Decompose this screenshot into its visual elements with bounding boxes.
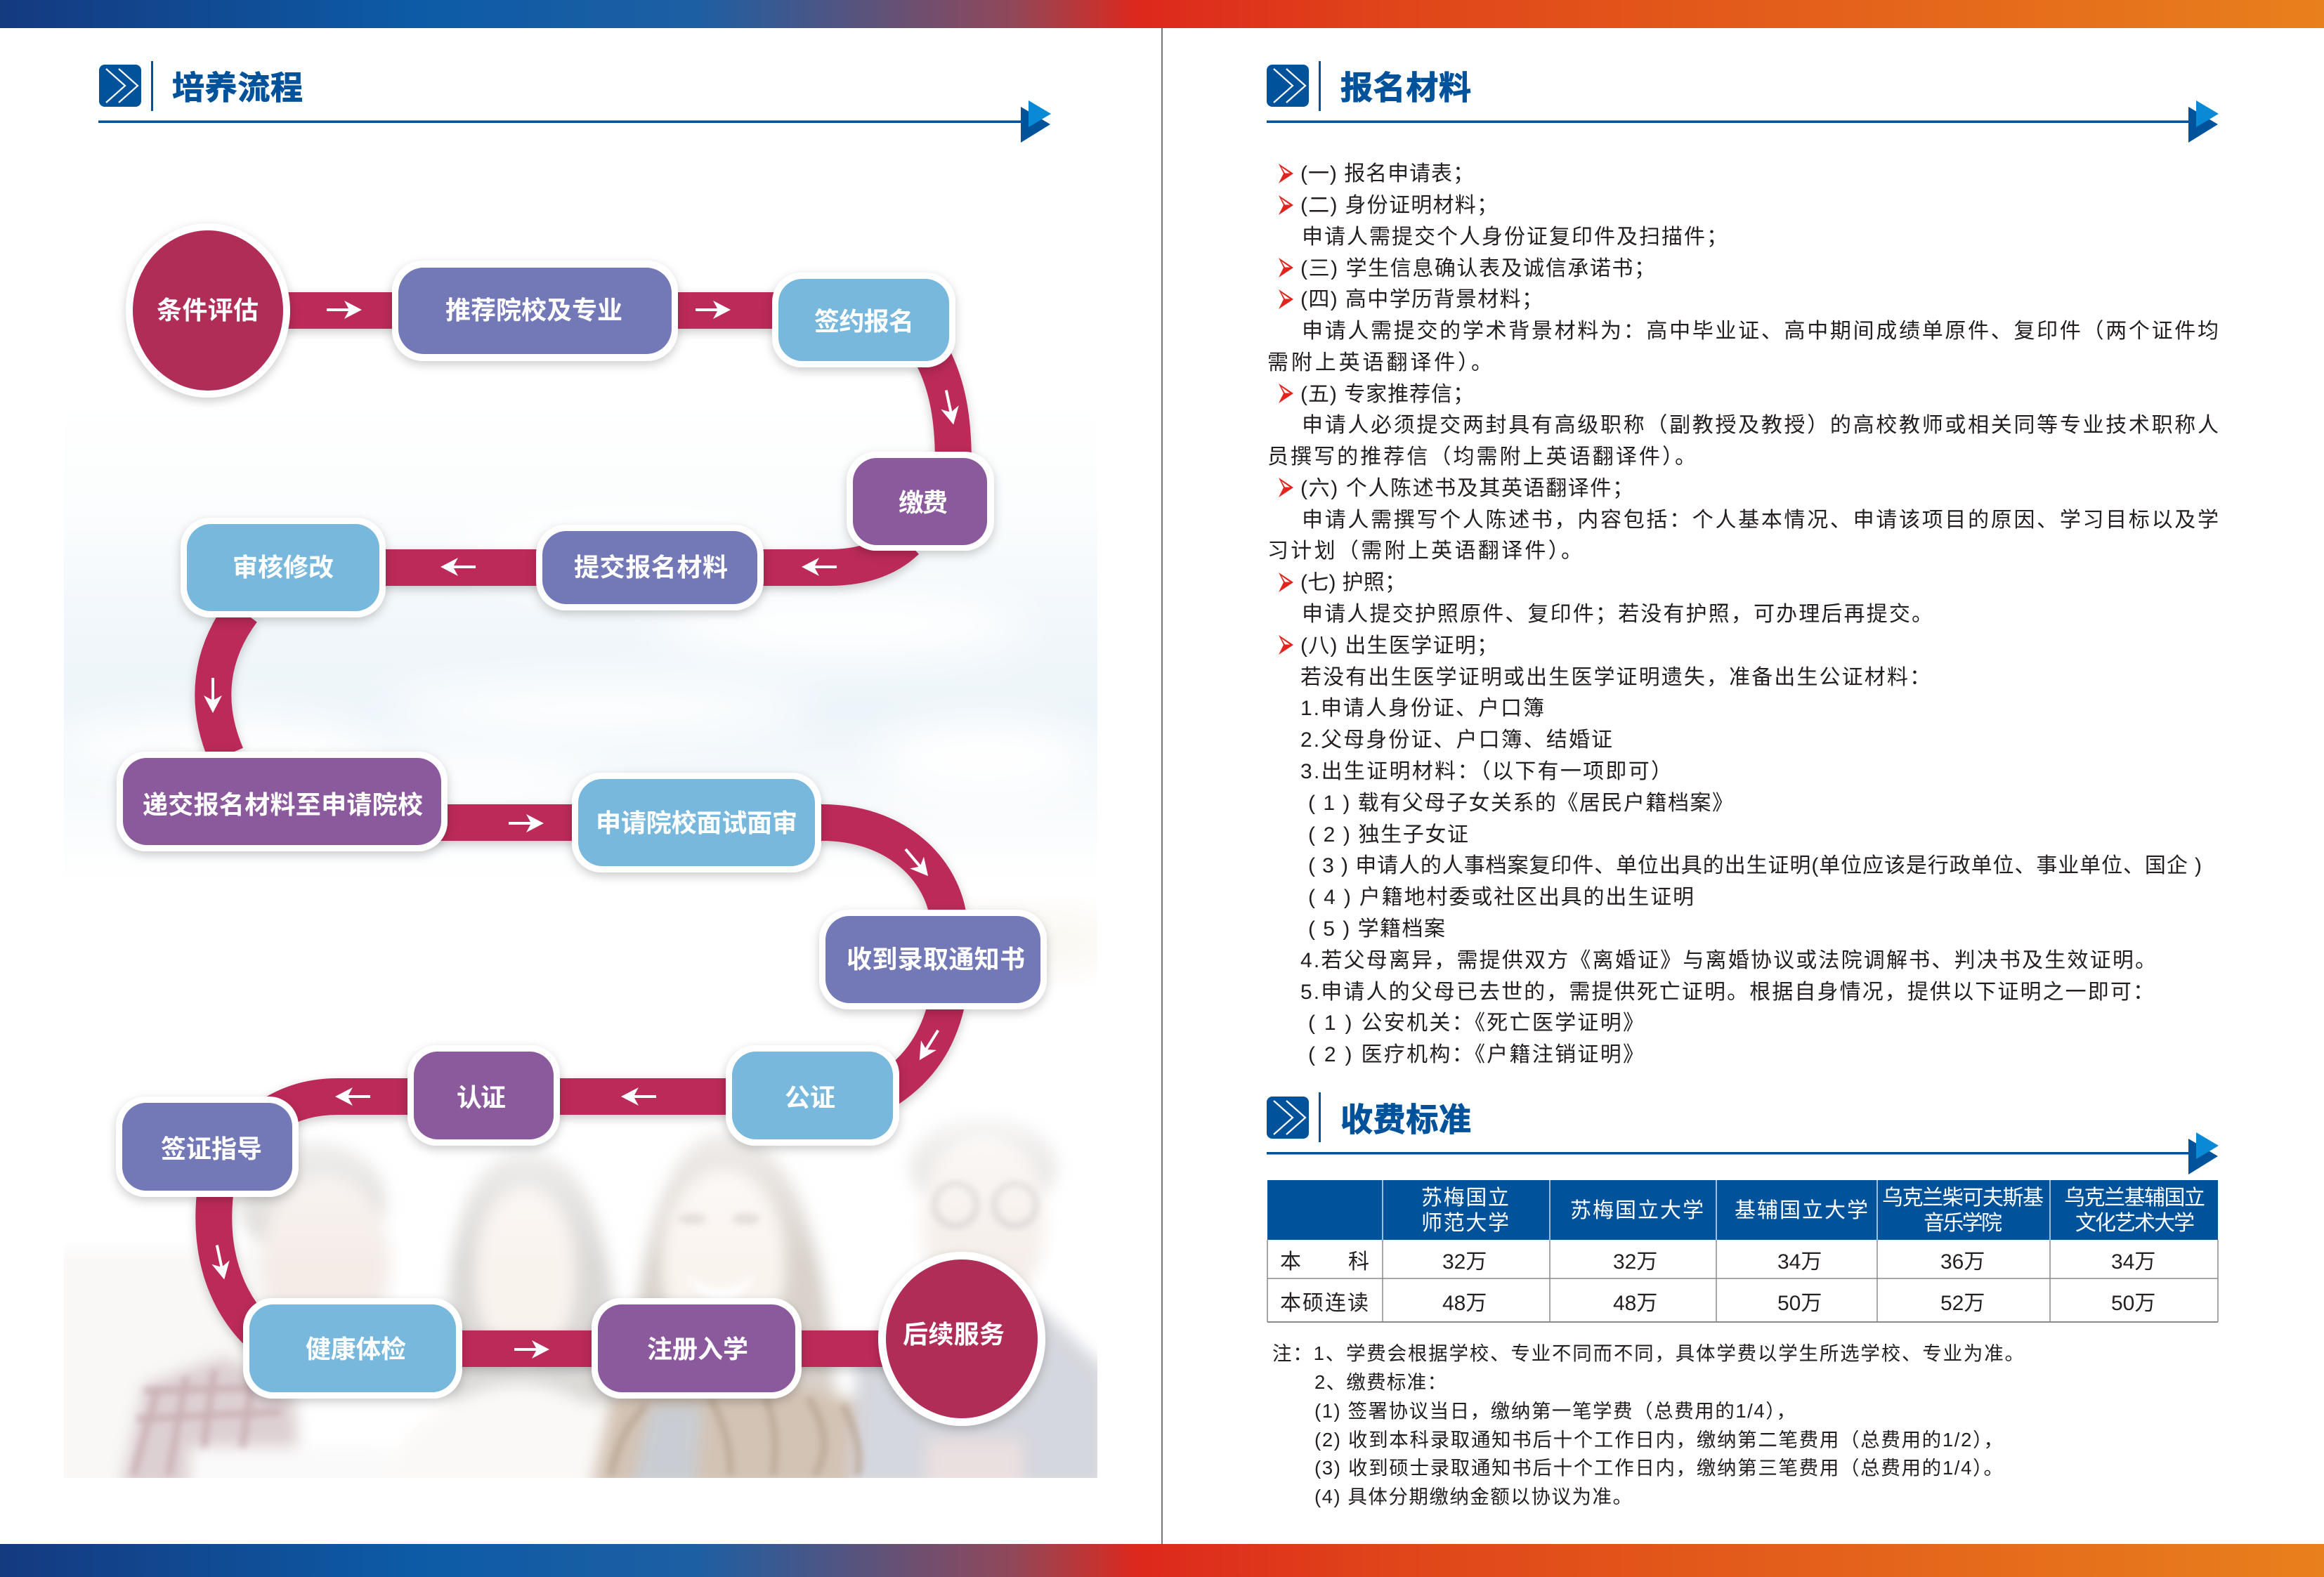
fee table: 乌克兰柴可夫斯基 [1882,1186,2044,1210]
fee table [1267,1180,2218,1322]
fee table: 本硕连读 [1280,1292,1369,1315]
step: 申请院校面试面审 [572,773,821,872]
step: 推荐院校及专业: 推荐院校及专业 [445,296,622,325]
text block: application materials list: (七) 护照； [1300,571,1406,594]
text block: application materials list: (八) 出生医学证明； [1300,634,1498,657]
text block: fee notes: (1) 签署协议当日，缴纳第一笔学费（总费用的1/4）， [1314,1400,1796,1422]
fee table: 基辅国立大学 [1735,1199,1868,1222]
text block: application materials list: 2.父母身份证、户口簿、结婚证 [1300,728,1612,752]
fee table: 50万 [2111,1292,2155,1315]
fee table: 苏梅国立 [1421,1186,1509,1210]
bottom gradient bar [0,1544,2324,1577]
step: 认证 [407,1045,560,1146]
panel: faded photo background of sky and students [42,400,1131,1489]
icon: line end arrow [1021,100,1051,143]
step: 审核修改 [181,518,386,617]
fee table: 50万 [1777,1292,1822,1315]
icon: double chevron [1267,1097,1309,1139]
flow chart: training process [116,223,1047,1426]
heading: 培养流程 [98,61,1051,143]
fee table: 本 [1280,1250,1301,1274]
step: 健康体检: 健康体检 [306,1335,406,1363]
text block: application materials list: 4.若父母离异，需提供双方《离婚证》与离婚协议或法院调解书、判决书及生效证明。 [1300,949,2156,972]
fee table: 34万 [1777,1250,1822,1274]
text block: application materials list: 员撰写的推荐信（均需附上英语翻译件）。 [1267,445,1696,469]
icon: double chevron [1267,65,1309,107]
text block: application materials list: 需附上英语翻译件）。 [1267,351,1492,374]
step: 审核修改: 审核修改 [233,553,334,582]
text block: fee notes [1272,1342,2024,1507]
text block: application materials list: (四) 高中学历背景材料； [1300,288,1543,311]
text block: application materials list: 1.申请人身份证、户口簿 [1300,697,1544,720]
fee table: 34万 [2111,1250,2155,1274]
text block: application materials list: (一) 报名申请表； [1300,162,1474,185]
text block: application materials list: ( 2 ) 医疗机构：《户籍注销证明》 [1308,1043,1644,1066]
fee table: 苏梅国立大学 [1570,1199,1704,1222]
fee table: 48万 [1613,1292,1657,1315]
text block: application materials list: ( 5 ) 学籍档案 [1308,917,1445,941]
text block: application materials list: 若没有出生医学证明或出生医学证明遗失，准备出生公证材料： [1300,666,1931,689]
top gradient bar [0,0,2324,28]
step: 健康体检 [243,1298,462,1399]
text block: application materials list: ( 4 ) 户籍地村委或社区出具的出生证明 [1308,886,1694,909]
fee table: 52万 [1940,1292,1985,1315]
text block: application materials list: 习计划（需附上英语翻译件）。 [1267,539,1582,563]
text block: fee notes: (4) 具体分期缴纳金额以协议为准。 [1314,1486,1632,1507]
heading text: 培养流程 [172,70,303,106]
step: 注册入学 [592,1298,802,1399]
step: 缴费: 缴费 [899,488,948,517]
text block: application materials list: ( 1 ) 载有父母子女关系的《居民户籍档案》 [1308,792,1733,815]
text block: application materials list: ( 3 ) 申请人的人事档案复印件、单位出具的出生证明(单位应该是行政单位、事业单位、国企 ) [1308,854,2202,877]
text block: application materials list: 3.出生证明材料：（以下有一项即可） [1300,760,1672,783]
text block: application materials list: (二) 身份证明材料； [1300,194,1498,217]
text block: application materials list: (三) 学生信息确认表及诚信承诺书； [1300,257,1655,280]
step: 提交报名材料 [536,525,764,610]
step: 推荐院校及专业 [392,261,678,361]
step: 签约报名: 签约报名 [814,307,914,336]
step: 签证指导: 签证指导 [161,1134,262,1163]
step: 收到录取通知书: 收到录取通知书 [847,945,1025,974]
step: 递交报名材料至申请院校 [117,752,448,851]
fee table: 师范大学 [1421,1212,1509,1235]
fee table: 32万 [1613,1250,1657,1274]
text block: application materials list: 申请人需撰写个人陈述书，内容包括：个人基本情况、申请该项目的原因、学习目标以及学 [1302,509,2219,532]
connector paths [213,310,953,1349]
text block: application materials list: (六) 个人陈述书及其英语翻译件； [1300,477,1633,500]
text block: application materials list: 申请人需提交个人身份证复印件及扫描件； [1302,225,1728,249]
text block: fee notes: (3) 收到硕士录取通知书后十个工作日内，缴纳第三笔费用（总费用的1/4）。 [1314,1457,2003,1479]
step: 公证: 公证 [785,1083,835,1112]
step: 注册入学: 注册入学 [647,1335,748,1363]
step: 后续服务 [878,1252,1045,1426]
step: 条件评估: 条件评估 [157,296,259,325]
text block: application materials list: 申请人需提交的学术背景材料为：高中毕业证、高中期间成绩单原件、复印件（两个证件均 [1302,320,2219,343]
arrows on connectors [204,301,962,1359]
icon: line end arrow [2188,100,2219,143]
step: 签证指导 [116,1097,299,1197]
text block: application materials list: 申请人必须提交两封具有高级职称（副教授及教授）的高校教师或相关同等专业技术职称人 [1302,414,2219,437]
step: 公证 [726,1045,899,1146]
fee table: 文化艺术大学 [2075,1212,2195,1235]
step: 缴费 [847,452,994,551]
text block: application materials list: ( 1 ) 公安机关：《死亡医学证明》 [1308,1012,1644,1035]
text block: fee notes: (2) 收到本科录取通知书后十个工作日内，缴纳第二笔费用（总费用的1/2）， [1314,1429,2003,1451]
heading text: 收费标准 [1340,1101,1471,1138]
step: 签约报名 [772,273,955,367]
text block: fee notes: 2、缴费标准： [1314,1371,1447,1393]
step: 后续服务: 后续服务 [903,1320,1005,1349]
fee table: 32万 [1442,1250,1487,1274]
red bullet arrows [1279,164,1293,655]
step: 条件评估 [126,223,290,398]
text block: application materials list: 申请人提交护照原件、复印件；若没有护照，可办理后再提交。 [1302,603,1933,626]
step: 提交报名材料: 提交报名材料 [574,553,728,582]
step: 认证: 认证 [457,1083,506,1112]
text block: application materials list: ( 2 ) 独生子女证 [1308,823,1468,846]
heading text: 报名材料 [1340,70,1471,106]
heading: 报名材料 [1267,61,2219,143]
step: 申请院校面试面审: 申请院校面试面审 [596,809,797,837]
text block: application materials list: (五) 专家推荐信； [1300,383,1474,406]
heading: 收费标准 [1267,1092,2219,1174]
fee table: 36万 [1940,1250,1985,1274]
centre fold line [1161,28,1163,1544]
icon: line end arrow [2188,1132,2219,1174]
step: 收到录取通知书 [819,910,1047,1009]
icon: double chevron [99,65,141,107]
text block: application materials list: 5.申请人的父母已去世的，需提供死亡证明。根据自身情况，提供以下证明之一即可： [1300,981,2154,1004]
fee table: 科 [1348,1250,1369,1274]
text block: application materials list [1267,162,2219,1066]
fee table: 音乐学院 [1924,1212,2002,1235]
step: 递交报名材料至申请院校: 递交报名材料至申请院校 [143,790,423,819]
fee table: 48万 [1442,1292,1487,1315]
fee table: 乌克兰基辅国立 [2064,1186,2205,1210]
text block: fee notes: 注：1、学费会根据学校、专业不同而不同，具体学费以学生所选学校、专业为准。 [1272,1342,2024,1364]
